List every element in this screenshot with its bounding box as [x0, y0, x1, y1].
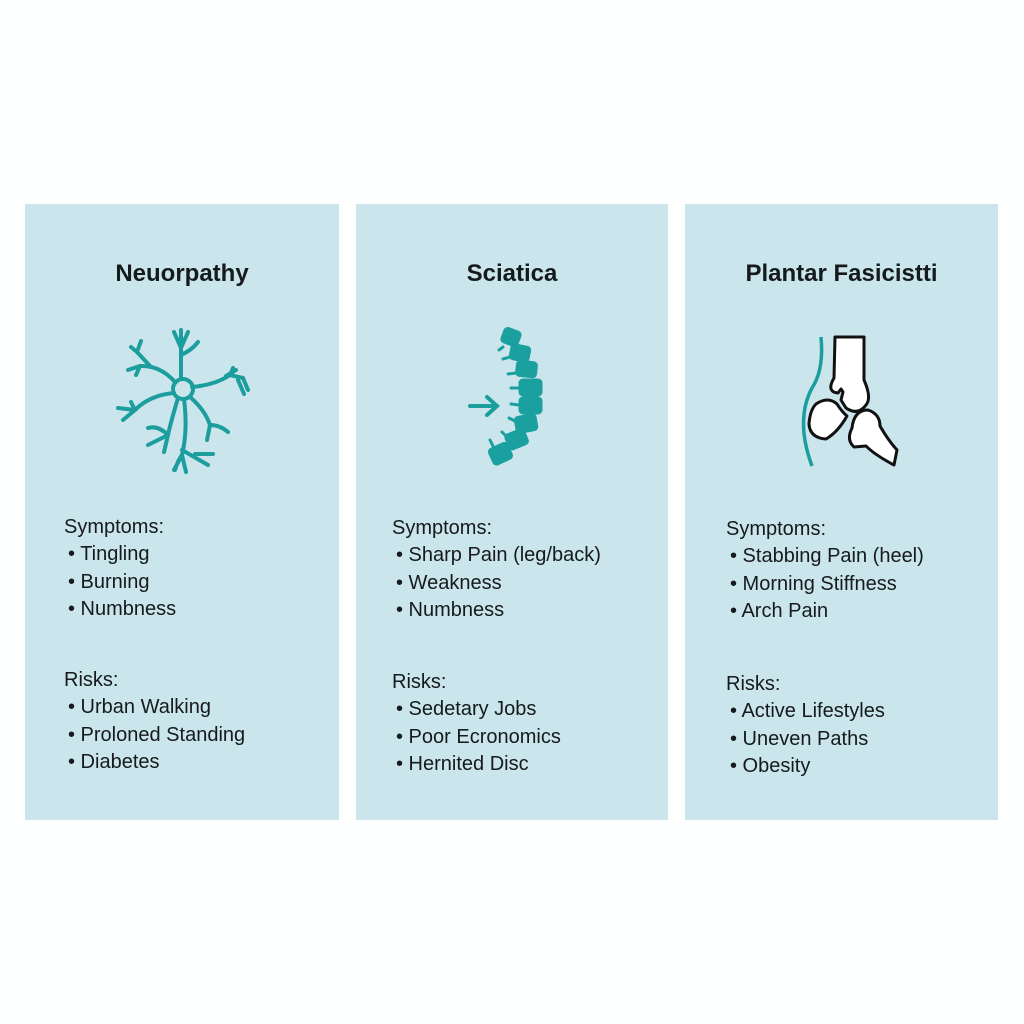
heading: neuropathy: Neuorpathy — [115, 260, 249, 287]
icon: ankle bones — [802, 336, 898, 467]
text: risks: Risks: — [392, 671, 446, 693]
text: risks: • Hernited Disc — [396, 753, 529, 775]
panel: neuropathy — [25, 204, 339, 820]
text: risks: • Poor Ecronomics — [396, 726, 561, 748]
text: risks — [64, 669, 245, 773]
text: risks — [392, 671, 561, 775]
text: symptoms: • Sharp Pain (leg/back) — [396, 544, 601, 566]
text: risks: • Proloned Standing — [68, 724, 245, 746]
text: risks: Risks: — [726, 673, 780, 695]
text: symptoms: • Morning Stiffness — [730, 573, 897, 595]
text: symptoms: • Burning — [68, 571, 150, 593]
heading: sciatica: Sciatica — [467, 260, 557, 287]
panel: sciatica — [356, 204, 668, 820]
text: symptoms: • Weakness — [396, 572, 502, 594]
text: symptoms: • Arch Pain — [730, 600, 828, 622]
heading: plantar fasciitis: Plantar Fasicistti — [745, 260, 938, 287]
text: symptoms — [392, 517, 601, 621]
text: risks: • Diabetes — [68, 751, 160, 773]
text: risks: Risks: — [64, 669, 118, 691]
text: risks: • Urban Walking — [68, 696, 211, 718]
text: risks: • Sedetary Jobs — [396, 698, 536, 720]
text: symptoms: • Tingling — [68, 543, 150, 565]
text: symptoms: Symptoms: — [392, 517, 492, 539]
text: symptoms: Symptoms: — [64, 516, 164, 538]
text: symptoms: • Numbness — [396, 599, 504, 621]
text: risks: • Obesity — [730, 755, 810, 777]
text: risks: • Active Lifestyles — [730, 700, 885, 722]
text: symptoms — [726, 518, 924, 622]
icon: spine with arrow — [468, 327, 542, 466]
text: symptoms: Symptoms: — [726, 518, 826, 540]
text: symptoms: • Stabbing Pain (heel) — [730, 545, 924, 567]
icon: neuron — [116, 328, 250, 474]
text: risks — [726, 673, 885, 777]
text: risks: • Uneven Paths — [730, 728, 868, 750]
text: symptoms — [64, 516, 176, 620]
text: symptoms: • Numbness — [68, 598, 176, 620]
panel: plantar fasciitis — [685, 204, 998, 820]
